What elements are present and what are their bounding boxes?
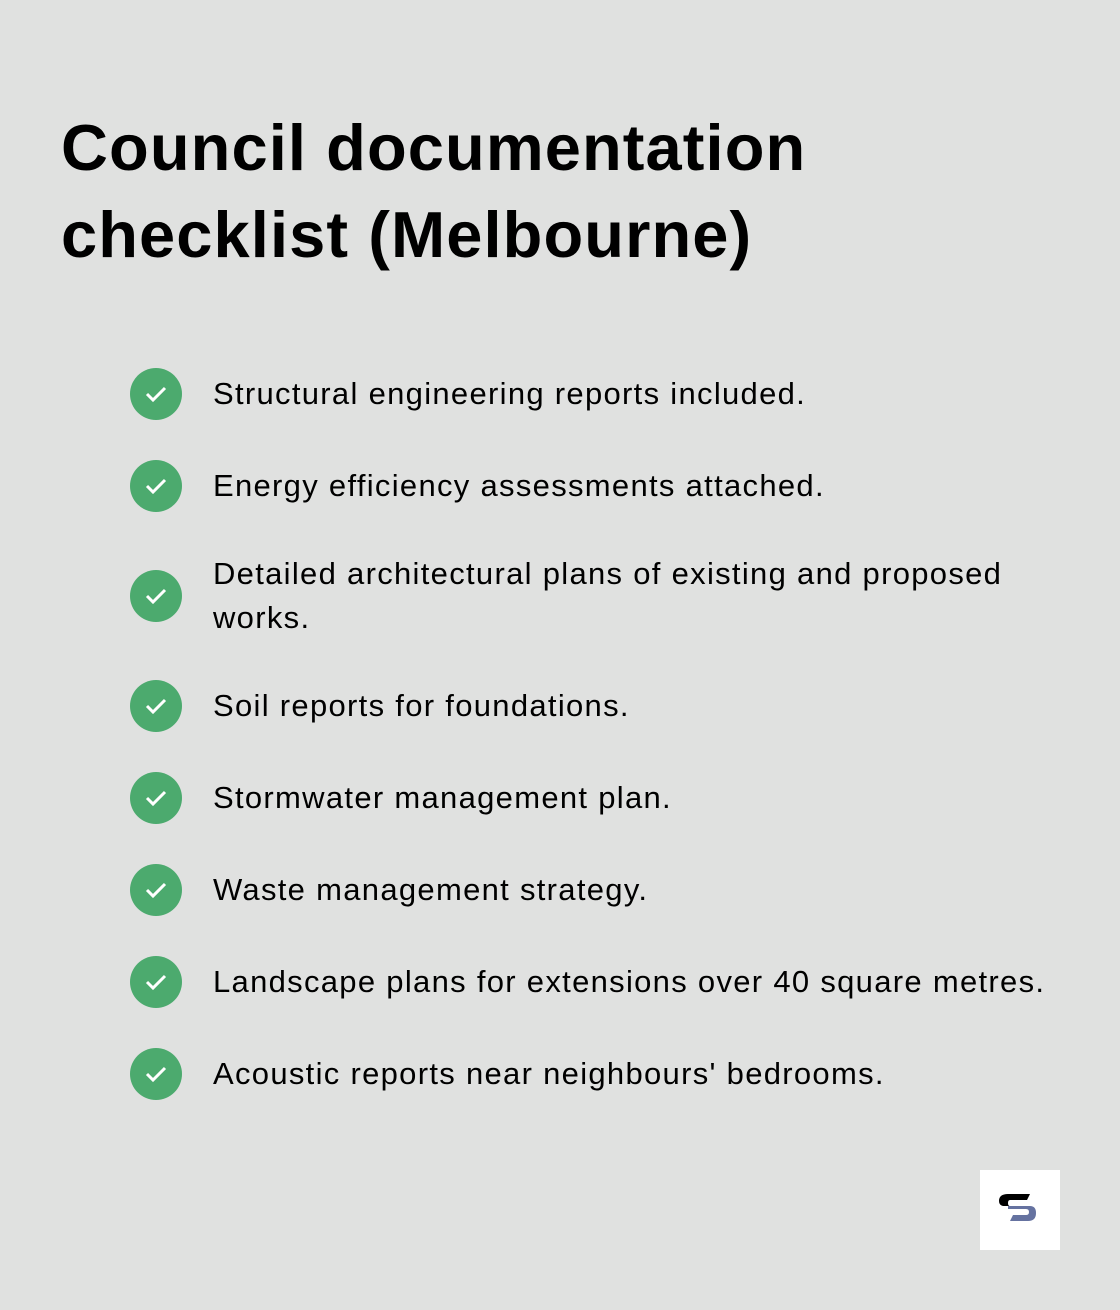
item 4: Soil reports for foundations. <box>213 688 630 723</box>
item 8: Acoustic reports near neighbours' bedrooms. <box>213 1056 885 1091</box>
item 5 <box>130 772 672 824</box>
item 3: Detailed architectural plans of existing and proposed <box>213 556 1002 591</box>
item 7: Landscape plans for extensions over 40 square metres. <box>213 964 1045 999</box>
item 7 <box>130 956 1045 1008</box>
item 2: Energy efficiency assessments attached. <box>213 468 825 503</box>
logo <box>980 1170 1060 1250</box>
item 2 <box>130 460 825 512</box>
title <box>61 111 806 271</box>
item 6: Waste management strategy. <box>213 872 648 907</box>
item 6 <box>130 864 648 916</box>
title: Council documentation <box>61 111 806 184</box>
item 3: works. <box>213 600 310 635</box>
item 8 <box>130 1048 885 1100</box>
title: checklist (Melbourne) <box>61 198 752 271</box>
item 5: Stormwater management plan. <box>213 780 672 815</box>
item 4 <box>130 680 630 732</box>
item 3 <box>130 556 1002 635</box>
item 1 <box>130 368 806 420</box>
item 1: Structural engineering reports included. <box>213 376 806 411</box>
